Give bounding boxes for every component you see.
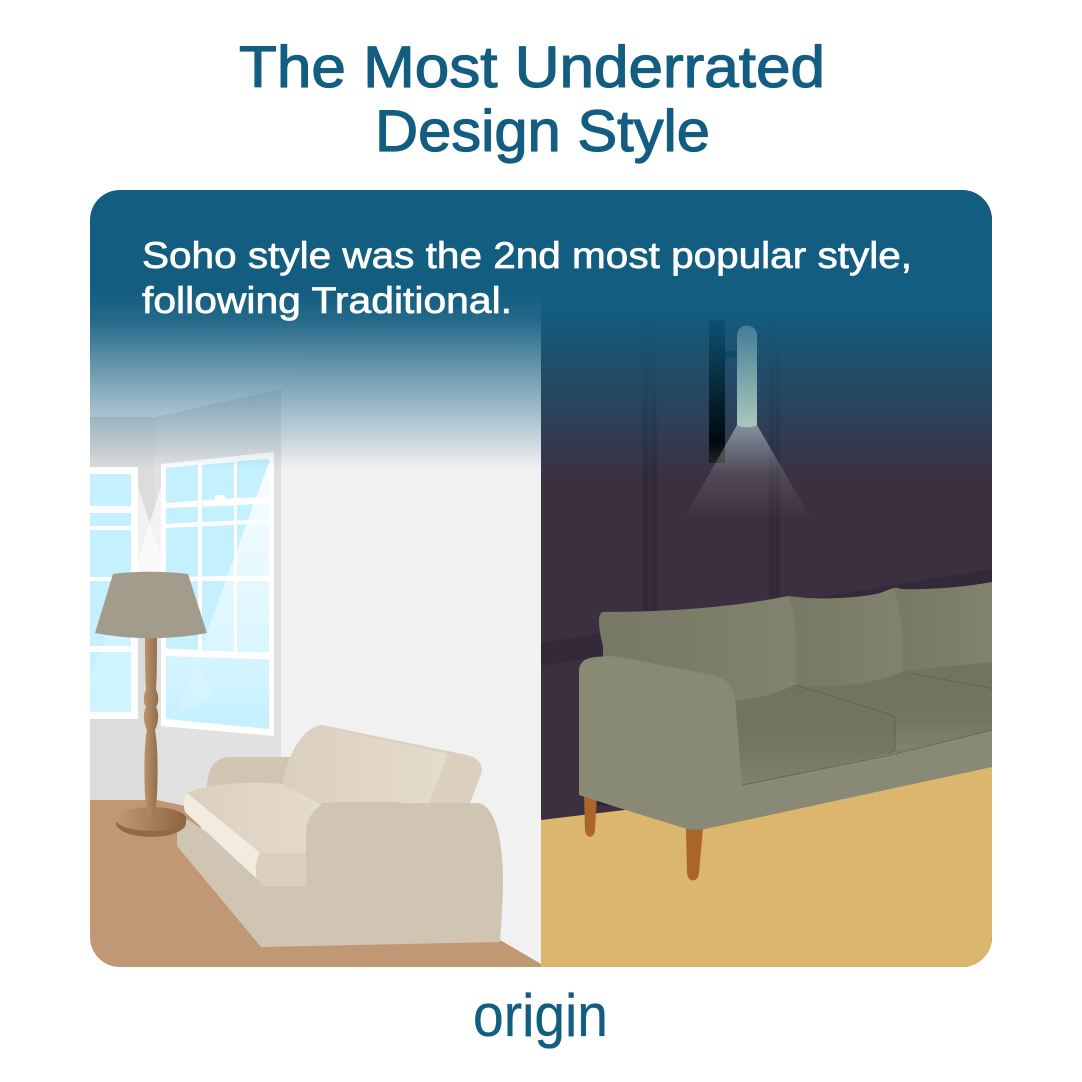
floor lamp xyxy=(95,572,207,837)
sofa back cushions xyxy=(893,582,992,673)
side wall and ceiling xyxy=(90,390,281,806)
panel: soho dark room xyxy=(541,190,992,967)
title: The Most Underrated xyxy=(239,35,825,100)
floor xyxy=(90,800,541,967)
logo: origin: origin xyxy=(473,982,608,1049)
olive sofa xyxy=(579,582,992,880)
wall sconce xyxy=(693,320,802,504)
sofa arm and front rail xyxy=(579,656,992,830)
floor xyxy=(541,766,992,967)
title: Design Style xyxy=(375,99,710,164)
wall panel moulding xyxy=(541,418,992,666)
top fade over right room xyxy=(541,310,992,464)
sofa seat cushions xyxy=(912,662,992,688)
beige sofa xyxy=(177,725,503,947)
panel text xyxy=(142,235,912,321)
left window xyxy=(90,467,138,719)
panel text: Soho style was the 2nd most popular style, xyxy=(142,235,912,276)
panel: style comparison xyxy=(90,190,992,967)
right window xyxy=(161,452,274,736)
title xyxy=(239,35,825,164)
panel text: following Traditional. xyxy=(142,280,512,321)
sofa seat backing xyxy=(762,671,948,765)
light beams xyxy=(90,462,269,713)
panel: traditional bright room xyxy=(90,389,541,967)
sofa legs xyxy=(584,794,597,837)
top fade over left room xyxy=(90,290,541,470)
